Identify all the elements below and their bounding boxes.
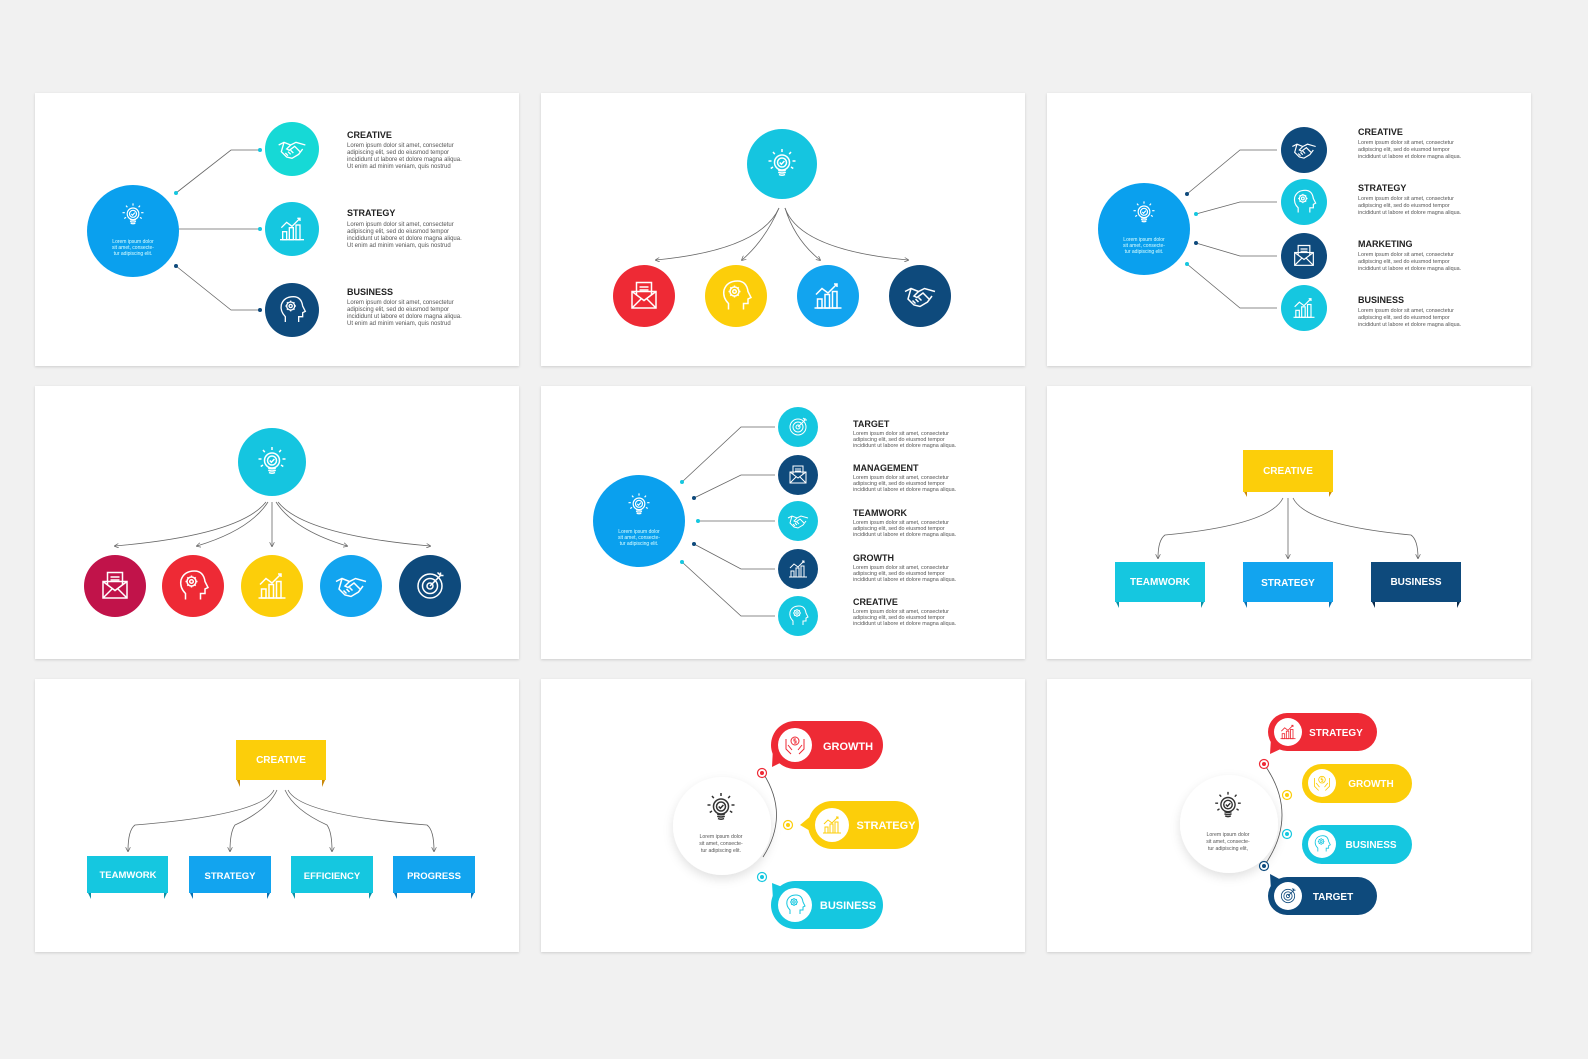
pill: business: BUSINESS <box>1345 840 1397 851</box>
box: creative <box>236 740 326 787</box>
text blocks: incididunt ut labore et dolore magna aliqua. <box>347 157 462 163</box>
center circle <box>1180 775 1278 873</box>
text blocks: incididunt ut labore et dolore magna aliqua. <box>853 487 956 493</box>
text blocks: TARGET <box>853 419 890 429</box>
text blocks: Lorem ipsum dolor sit amet, consectetur <box>853 565 949 571</box>
arrows <box>656 208 908 260</box>
pill: strategy: STRATEGY <box>1309 728 1363 739</box>
center circle: tur adipiscing elit, <box>1208 846 1248 852</box>
top circle <box>238 428 306 496</box>
connector lines <box>176 150 260 310</box>
bottom circles <box>613 265 951 327</box>
icon circles <box>265 122 319 337</box>
pill: business <box>1302 825 1412 864</box>
main circle: Lorem ipsum dolor <box>1123 237 1165 243</box>
pill: growth <box>1302 764 1412 803</box>
box: creative: CREATIVE <box>256 755 306 766</box>
center circle: sit amet, consecte- <box>1206 839 1250 845</box>
box: creative: CREATIVE <box>1263 466 1313 477</box>
pill: growth: GROWTH <box>823 741 873 753</box>
pill: growth: GROWTH <box>1348 779 1394 790</box>
text blocks: Lorem ipsum dolor sit amet, consectetur <box>853 520 949 526</box>
bottom circles <box>84 555 461 617</box>
text blocks: TEAMWORK <box>853 508 907 518</box>
main circle: tur adipiscing elit. <box>620 541 658 547</box>
text blocks: Lorem ipsum dolor sit amet, consectetur <box>347 222 454 228</box>
panel: card 9 speech pills four <box>1047 679 1531 952</box>
text blocks: BUSINESS <box>347 287 393 297</box>
main circle: tur adipiscing elit. <box>1125 249 1163 255</box>
text blocks: incididunt ut labore et dolore magna aliqua. <box>853 577 956 583</box>
boxes: teamwork strategy efficiency progress: TEAMWORK <box>100 870 157 881</box>
panel: card 5 five items <box>541 386 1025 659</box>
text blocks: incididunt ut labore et dolore magna aliqua. <box>853 621 956 627</box>
text blocks: GROWTH <box>853 553 894 563</box>
text blocks: adipiscing elit, sed do eiusmod tempor <box>853 481 945 487</box>
main circle: tur adipiscing elit. <box>114 251 152 257</box>
pill: strategy <box>800 801 919 849</box>
text blocks: STRATEGY <box>347 208 395 218</box>
text blocks: incididunt ut labore et dolore magna aliqua. <box>1358 266 1461 272</box>
text blocks: adipiscing elit, sed do eiusmod tempor <box>853 571 945 577</box>
pill: strategy: STRATEGY <box>856 820 916 832</box>
text blocks: Lorem ipsum dolor sit amet, consectetur <box>853 609 949 615</box>
text blocks: incididunt ut labore et dolore magna aliqua. <box>347 236 462 242</box>
text blocks: Lorem ipsum dolor sit amet, consectetur <box>1358 196 1454 202</box>
text blocks: STRATEGY <box>1358 183 1406 193</box>
pill: target <box>1268 874 1377 915</box>
pill: target: TARGET <box>1313 892 1353 903</box>
text blocks: adipiscing elit, sed do eiusmod tempor <box>1358 147 1450 153</box>
center circle <box>673 777 771 875</box>
text blocks: MARKETING <box>1358 239 1412 249</box>
panel: card 8 speech pills three <box>541 679 1025 952</box>
text blocks: Lorem ipsum dolor sit amet, consectetur <box>1358 252 1454 258</box>
boxes: teamwork strategy efficiency progress: PROGRESS <box>407 871 461 882</box>
boxes: teamwork strategy business: BUSINESS <box>1390 577 1442 588</box>
main circle: Lorem ipsum dolor <box>618 529 660 535</box>
pill: growth <box>771 721 883 769</box>
center circle: Lorem ipsum dolor <box>1207 832 1250 838</box>
panel: card 7 org chart four <box>35 679 519 952</box>
main circle: sit amet, consecte- <box>1123 243 1165 249</box>
text blocks: incididunt ut labore et dolore magna aliqua. <box>1358 210 1461 216</box>
text blocks: adipiscing elit, sed do eiusmod tempor <box>347 307 449 313</box>
boxes: teamwork strategy efficiency progress: EFFICIENCY <box>304 871 361 882</box>
panel: card 3 four items <box>1047 93 1531 366</box>
text blocks: MANAGEMENT <box>853 463 919 473</box>
text blocks: Lorem ipsum dolor sit amet, consectetur <box>1358 308 1454 314</box>
center circle: tur adipiscing elit. <box>701 848 741 854</box>
main circle: Lorem ipsum dolor <box>112 239 154 245</box>
text blocks: adipiscing elit, sed do eiusmod tempor <box>853 437 945 443</box>
text blocks: incididunt ut labore et dolore magna aliqua. <box>853 443 956 449</box>
text blocks: adipiscing elit, sed do eiusmod tempor <box>347 150 449 156</box>
text blocks: BUSINESS <box>1358 295 1404 305</box>
pill: strategy <box>1268 713 1377 754</box>
text blocks: adipiscing elit, sed do eiusmod tempor <box>853 526 945 532</box>
text blocks: Ut enim ad minim veniam, quis nostrud <box>347 243 451 249</box>
pill: business <box>771 881 883 929</box>
main circle <box>1098 183 1190 275</box>
text blocks <box>1358 127 1461 328</box>
text blocks: incididunt ut labore et dolore magna aliqua. <box>853 532 956 538</box>
boxes: teamwork strategy efficiency progress <box>87 856 475 899</box>
text blocks: incididunt ut labore et dolore magna aliqua. <box>1358 322 1461 328</box>
panel: card 2 four circles <box>541 93 1025 366</box>
center circle: Lorem ipsum dolor <box>700 834 743 840</box>
text blocks: adipiscing elit, sed do eiusmod tempor <box>1358 315 1450 321</box>
center circle: sit amet, consecte- <box>699 841 743 847</box>
icon circles <box>1281 127 1327 331</box>
boxes: teamwork strategy business <box>1115 562 1461 608</box>
text blocks: adipiscing elit, sed do eiusmod tempor <box>853 615 945 621</box>
text blocks: CREATIVE <box>347 130 392 140</box>
top circle <box>747 129 817 199</box>
text blocks: adipiscing elit, sed do eiusmod tempor <box>1358 203 1450 209</box>
panel: card 1 creative strategy business <box>35 93 519 366</box>
text blocks: Lorem ipsum dolor sit amet, consectetur <box>1358 140 1454 146</box>
boxes: teamwork strategy efficiency progress: STRATEGY <box>204 871 256 882</box>
main circle: sit amet, consecte- <box>618 535 660 541</box>
text blocks: incididunt ut labore et dolore magna aliqua. <box>1358 154 1461 160</box>
main circle <box>87 185 179 277</box>
text blocks: Lorem ipsum dolor sit amet, consectetur <box>853 431 949 437</box>
text blocks: incididunt ut labore et dolore magna aliqua. <box>347 314 462 320</box>
box: creative <box>1243 450 1333 497</box>
text blocks: Ut enim ad minim veniam, quis nostrud <box>347 164 451 170</box>
text blocks: CREATIVE <box>1358 127 1403 137</box>
main circle <box>593 475 685 567</box>
text blocks <box>347 130 462 327</box>
icon circles <box>778 407 818 636</box>
boxes: teamwork strategy business: STRATEGY <box>1261 578 1315 589</box>
text blocks: Lorem ipsum dolor sit amet, consectetur <box>347 143 454 149</box>
main circle: sit amet, consecte- <box>112 245 154 251</box>
text blocks: adipiscing elit, sed do eiusmod tempor <box>347 229 449 235</box>
boxes: teamwork strategy business: TEAMWORK <box>1130 577 1191 588</box>
panel: card 4 five circles <box>35 386 519 659</box>
text blocks: CREATIVE <box>853 597 898 607</box>
text blocks: adipiscing elit, sed do eiusmod tempor <box>1358 259 1450 265</box>
panel: card 6 org chart three <box>1047 386 1531 659</box>
text blocks <box>853 419 956 627</box>
pill: business: BUSINESS <box>820 900 876 912</box>
text blocks: Lorem ipsum dolor sit amet, consectetur <box>347 300 454 306</box>
text blocks: Ut enim ad minim veniam, quis nostrud <box>347 321 451 327</box>
text blocks: Lorem ipsum dolor sit amet, consectetur <box>853 475 949 481</box>
